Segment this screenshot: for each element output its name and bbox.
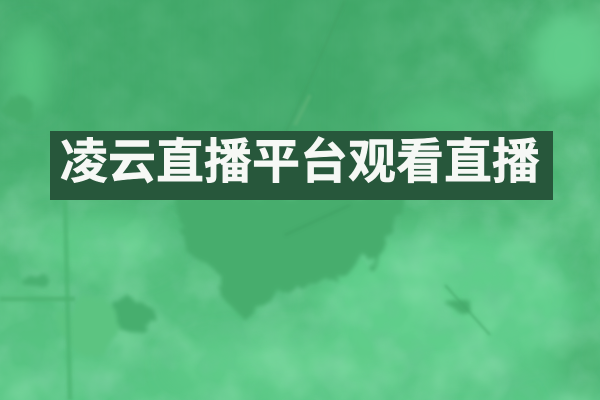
- title banner: [50, 131, 553, 200]
- title text: 凌云直播平台观看直播: [60, 136, 540, 189]
